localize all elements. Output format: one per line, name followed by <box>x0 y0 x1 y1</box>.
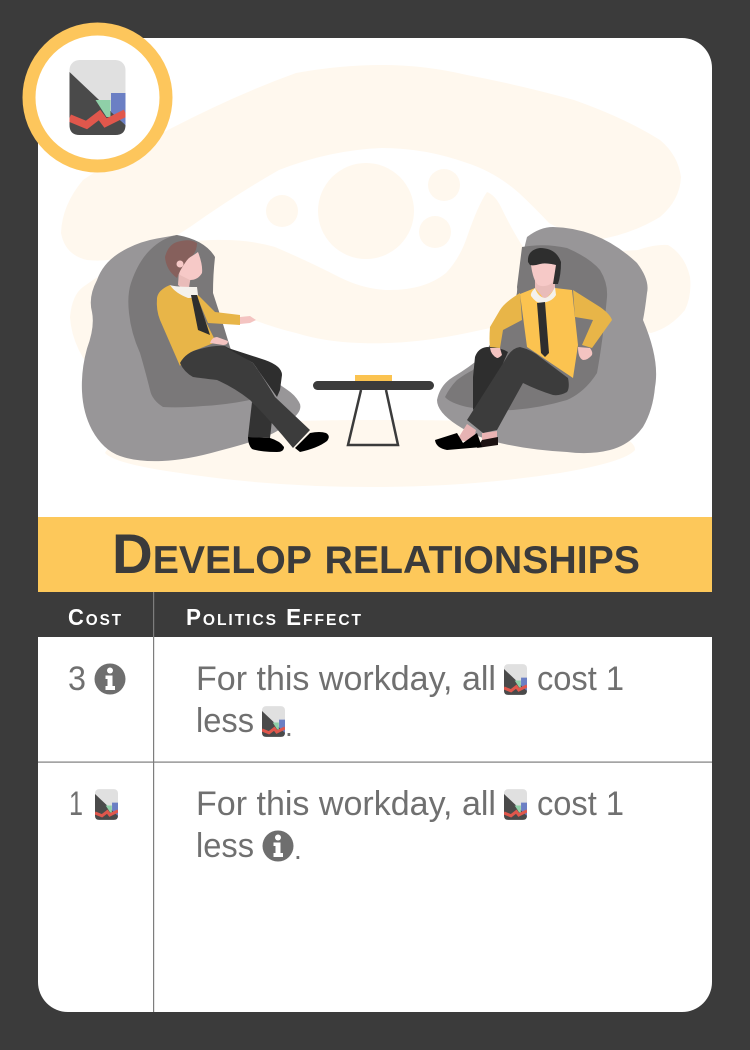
row 1 effect: cost 1 <box>537 660 624 698</box>
row 2 cost: 1 <box>69 785 83 823</box>
title banner <box>38 517 712 592</box>
row 2 effect: For this workday, all <box>196 785 496 823</box>
title: Develop relationships <box>112 522 640 585</box>
badge: politics icon in yellow ring <box>29 29 166 166</box>
left bean bag chair <box>82 235 300 461</box>
row 1 effect <box>196 660 624 742</box>
icon: politics <box>262 706 285 737</box>
icon: info <box>94 664 126 694</box>
row 1 cost: 3 <box>68 660 86 698</box>
illustration: two people talking in bean bag chairs <box>61 65 690 487</box>
row 2 effect: cost 1 <box>537 785 624 823</box>
heading: cost: Cost <box>68 604 123 630</box>
left man <box>157 240 329 452</box>
table <box>313 375 434 445</box>
heading: politics effect: Politics Effect <box>186 604 363 630</box>
right bean bag chair <box>437 227 656 453</box>
row 1 effect: less <box>196 702 254 740</box>
row 1 effect: . <box>285 711 293 742</box>
row 1 effect: For this workday, all <box>196 660 496 698</box>
table header <box>38 592 712 637</box>
icon: info <box>262 830 294 862</box>
row 2 effect: less <box>196 827 254 865</box>
icon: politics <box>504 664 527 695</box>
row 2 effect <box>196 785 624 865</box>
row 2 effect: . <box>294 834 302 865</box>
icon: politics <box>504 789 527 820</box>
row 1 cost <box>68 660 126 698</box>
icon: politics <box>95 789 118 820</box>
row 2 cost <box>69 785 118 823</box>
background blobs <box>61 65 690 487</box>
right man <box>435 248 612 450</box>
